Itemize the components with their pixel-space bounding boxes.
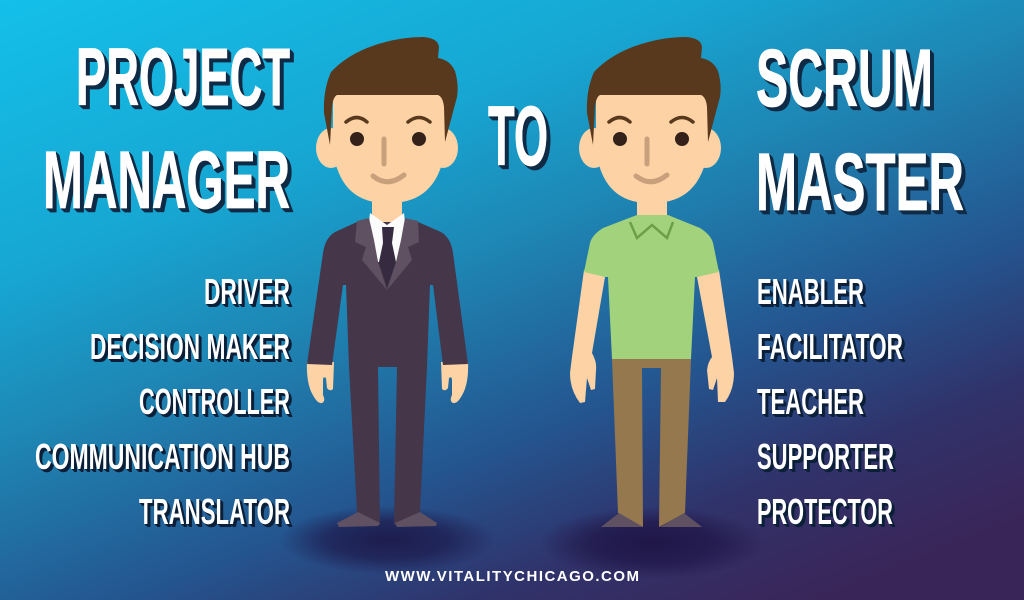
list: scrum master roles: FACILITATOR xyxy=(757,326,903,367)
ground shadow: left figure xyxy=(280,506,496,574)
ground shadow: right figure xyxy=(540,507,764,579)
footer url: WWW.VITALITYCHICAGO.COM xyxy=(385,568,639,585)
list: project manager roles: CONTROLLER xyxy=(139,381,290,422)
title: project manager: MANAGER xyxy=(43,135,290,226)
pants xyxy=(612,359,691,527)
list: scrum master roles: PROTECTOR xyxy=(757,491,893,532)
lapels xyxy=(355,218,419,290)
list: scrum master roles xyxy=(757,271,903,532)
list: scrum master roles: ENABLER xyxy=(757,271,864,312)
hands xyxy=(307,362,468,403)
title: project manager xyxy=(43,32,290,226)
title: scrum master xyxy=(756,33,964,228)
list: scrum master roles: TEACHER xyxy=(757,381,864,422)
list: project manager roles: DECISION MAKER xyxy=(90,326,290,367)
head xyxy=(579,37,721,203)
neck xyxy=(637,190,667,225)
head xyxy=(316,37,458,203)
arms xyxy=(570,270,734,403)
collar xyxy=(630,222,673,238)
list: project manager roles xyxy=(35,271,290,532)
suit xyxy=(307,222,468,525)
list: project manager roles: COMMUNICATION HUB xyxy=(35,436,290,477)
list: project manager roles: TRANSLATOR xyxy=(139,491,290,532)
title: project manager: PROJECT xyxy=(76,32,290,123)
figure: project manager in suit xyxy=(307,37,468,527)
list: scrum master roles: SUPPORTER xyxy=(757,436,894,477)
shoes xyxy=(337,512,437,527)
figure: scrum master in green polo xyxy=(570,37,734,527)
list: project manager roles: DRIVER xyxy=(204,271,290,312)
neck xyxy=(372,190,402,225)
shirt xyxy=(369,213,405,262)
tie xyxy=(379,227,396,287)
title: to: TO xyxy=(488,89,548,183)
shoes xyxy=(601,513,702,527)
shirt xyxy=(584,215,719,359)
